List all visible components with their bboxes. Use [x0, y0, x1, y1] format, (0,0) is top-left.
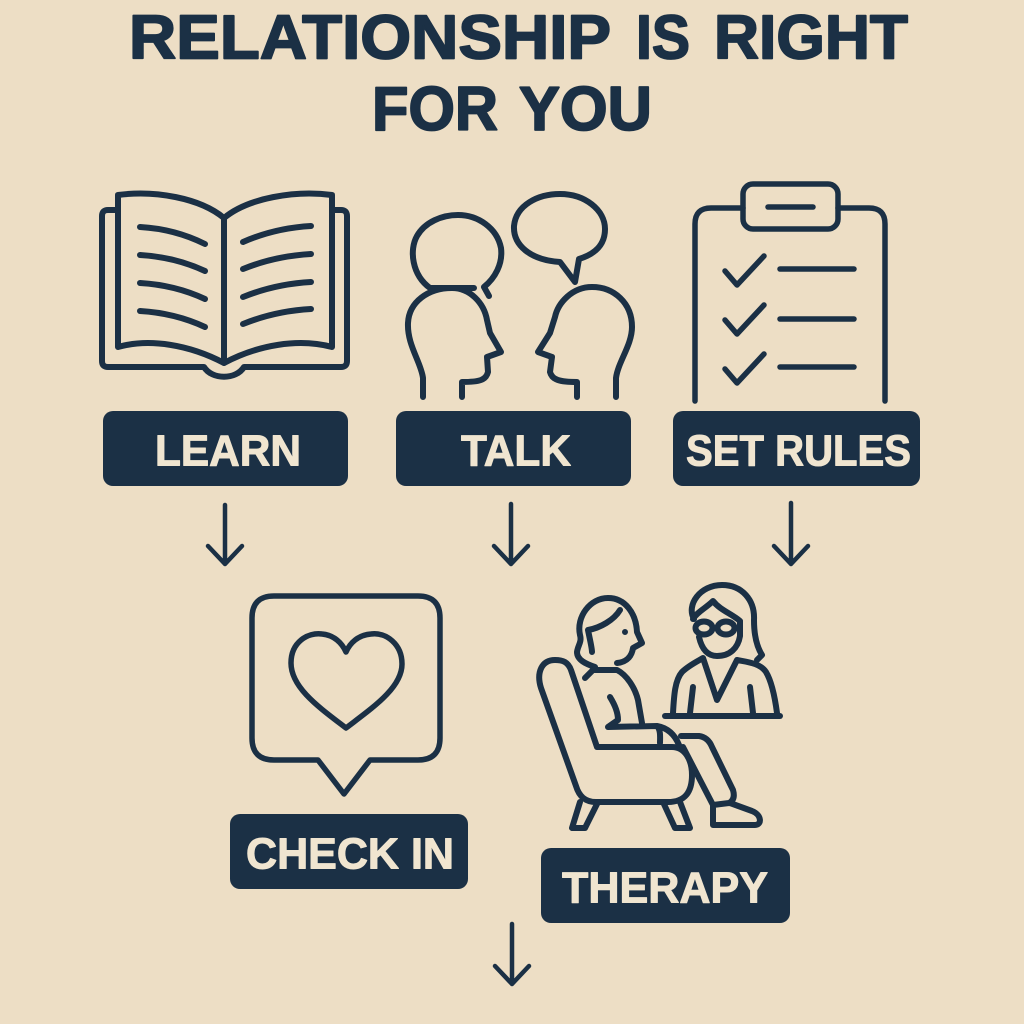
- label: set rules: SET RULES: [686, 426, 911, 476]
- title: RIGHT: [714, 4, 908, 72]
- title: [129, 4, 908, 144]
- title: RELATIONSHIP: [129, 4, 611, 72]
- label: talk: [396, 411, 631, 486]
- chair legs: [572, 802, 690, 828]
- client leg and foot: [681, 736, 760, 825]
- title: YOU: [519, 75, 652, 144]
- client head: [577, 598, 642, 667]
- armchair: [539, 660, 692, 802]
- title: FOR: [372, 75, 498, 144]
- arrow: set rules down: [774, 503, 808, 564]
- label: therapy: [541, 848, 790, 923]
- label: therapy: THERAPY: [562, 864, 768, 912]
- arrow: talk down: [494, 504, 528, 564]
- label: set rules: [673, 411, 920, 486]
- label: check in: CHECK IN: [246, 830, 454, 878]
- client body and arm: [585, 670, 679, 745]
- title: IS: [636, 4, 690, 72]
- label: learn: LEARN: [155, 426, 301, 476]
- label: check in: [230, 814, 468, 889]
- icon: therapy session: [539, 585, 780, 828]
- label: learn: [103, 411, 348, 486]
- icon: two people talking: [408, 194, 632, 397]
- therapist: [692, 585, 762, 660]
- arrow: final down: [495, 924, 529, 984]
- arrow: learn down: [208, 505, 242, 564]
- icon: heart speech bubble: [252, 596, 440, 794]
- label: talk: TALK: [461, 426, 571, 476]
- icon: open book: [102, 194, 347, 377]
- client eye: [622, 630, 628, 634]
- icon: clipboard checklist: [695, 184, 885, 401]
